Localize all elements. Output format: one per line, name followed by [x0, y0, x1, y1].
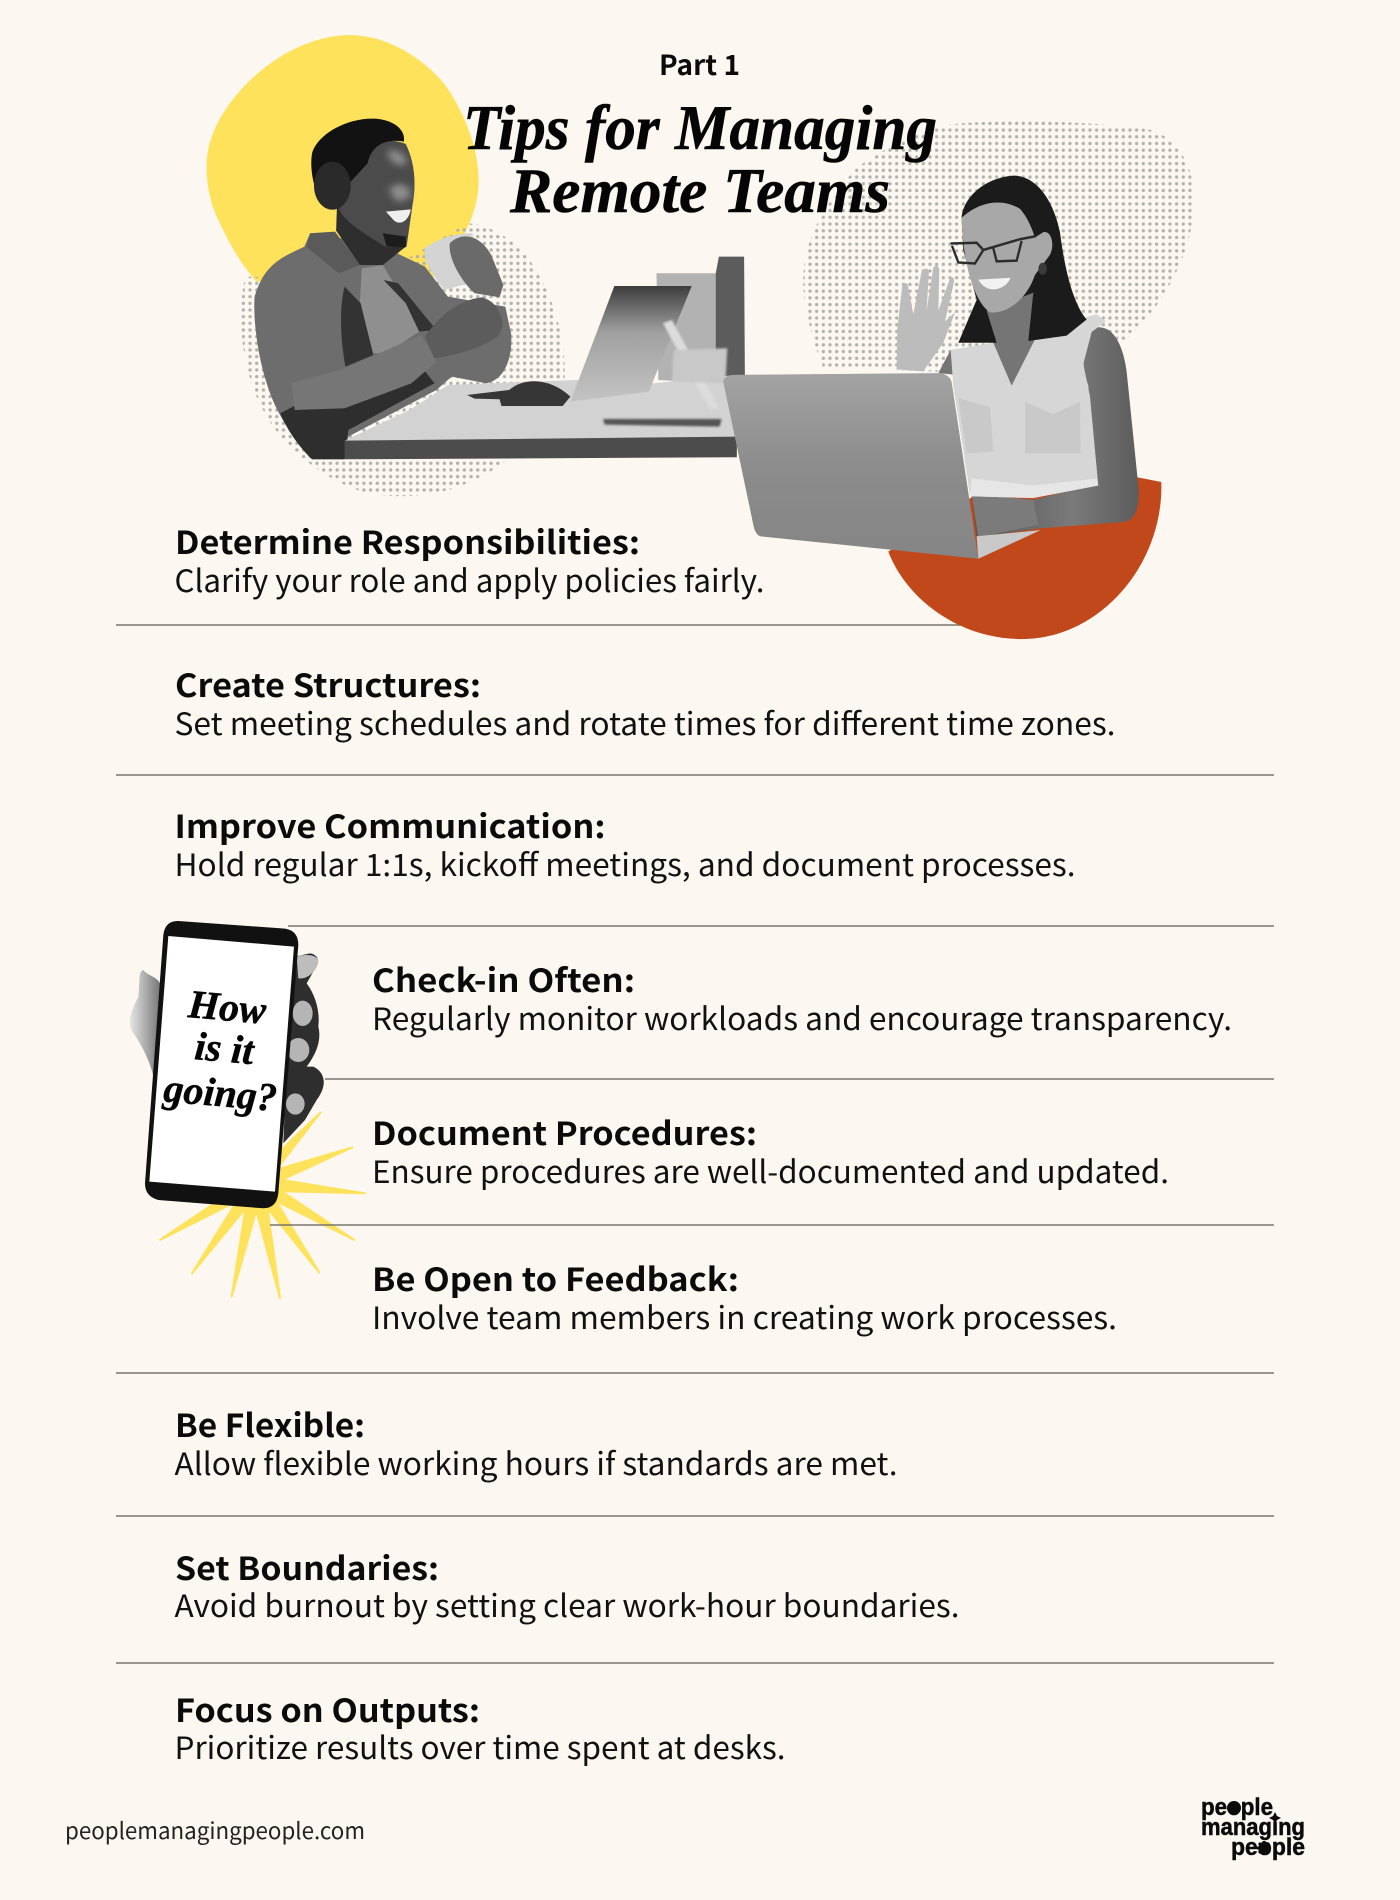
logo — [1201, 1794, 1305, 1861]
man figure — [254, 119, 511, 459]
tip: Focus on Outputs — [174, 1686, 786, 1768]
phone text: How — [186, 981, 268, 1033]
headphones — [314, 162, 351, 210]
tip: Be Open to Feedback — [372, 1255, 1117, 1338]
desk surface — [345, 375, 737, 441]
tip: Be Open to Feedback: Be Open to Feedback: — [372, 1255, 739, 1301]
orange semicircle — [888, 457, 1161, 639]
beard — [383, 233, 406, 247]
logo asterisk o — [1257, 1841, 1271, 1855]
tip: Set Boundaries: Avoid burnout by setting clear work-hour boundaries. — [174, 1581, 960, 1626]
illustration: woman waving at laptop — [723, 121, 1194, 639]
tip: Be Open to Feedback: Involve team members in creating work processes. — [372, 1293, 1117, 1338]
title: Tips for Managing — [463, 92, 937, 163]
hand left — [130, 970, 160, 1077]
tip: Be Flexible: Be Flexible: — [175, 1401, 365, 1447]
hand on keyboard — [972, 494, 1038, 537]
logo: managing — [1201, 1814, 1305, 1841]
phone screen — [149, 936, 294, 1192]
fist — [425, 297, 502, 358]
tip: Create Structures: Create Structures: — [175, 661, 481, 707]
shirt — [254, 233, 511, 459]
tip: Set Boundaries: Set Boundaries: — [175, 1544, 439, 1590]
shirt dark inner panels — [341, 280, 436, 367]
desk front — [345, 437, 737, 459]
tip: Focus on Outputs: Prioritize results over time spent at desks. — [174, 1723, 786, 1768]
tip: Create Structures: Set meeting schedules and rotate times for different time zones. — [174, 699, 1116, 744]
illustration: man with coffee at desk — [206, 35, 745, 496]
logo spark — [1269, 1812, 1281, 1824]
phone text: is it — [193, 1023, 257, 1073]
tip: Create Structures — [174, 661, 1116, 744]
footer URL: peoplemanagingpeople.com — [65, 1812, 365, 1846]
lower shirt shadow — [280, 357, 434, 459]
phone body — [145, 921, 298, 1208]
belt — [970, 478, 1098, 498]
pen stand — [663, 320, 720, 410]
tip: Improve Communication: Hold regular 1:1s, kickoff meetings, and document processes. — [174, 840, 1076, 885]
tip: Improve Communication: Improve Communication: — [174, 802, 606, 848]
halftone dots right — [803, 121, 1194, 375]
tip: Determine Responsibilities — [174, 518, 764, 601]
laptop back — [570, 286, 692, 402]
hair — [311, 119, 404, 208]
smile — [386, 209, 411, 223]
part label: Part 1 — [659, 44, 740, 84]
tip: Set Boundaries — [174, 1544, 960, 1626]
collar — [306, 232, 360, 273]
tip: Document Procedures: Document Procedures: — [372, 1109, 757, 1155]
phone text — [161, 980, 286, 1120]
hand — [897, 265, 955, 371]
pockets — [958, 398, 1081, 453]
tip: Check-in Often — [372, 956, 1232, 1039]
starburst — [160, 1112, 365, 1298]
sleeve — [291, 335, 436, 410]
logo: people — [1231, 1834, 1305, 1861]
tip: Be Flexible — [174, 1401, 898, 1484]
phone text: going? — [161, 1065, 279, 1120]
tip: Document Procedures: Ensure procedures are well-documented and updated. — [372, 1147, 1169, 1192]
header — [463, 44, 937, 226]
tip: Improve Communication — [174, 802, 1076, 885]
face — [962, 202, 1052, 313]
tip: Check-in Often: Regularly monitor workloads and encourage transparency. — [372, 994, 1232, 1039]
tip: Be Flexible: Allow flexible working hours if standards are met. — [174, 1439, 898, 1484]
title — [463, 92, 937, 226]
logo filled o — [1227, 1801, 1241, 1815]
tip: Check-in Often: Check-in Often: — [372, 956, 635, 1002]
mouse and tablet — [467, 381, 570, 406]
blouse — [951, 314, 1106, 498]
mug — [424, 233, 473, 290]
face — [339, 141, 415, 247]
divider over starburst — [270, 1223, 1274, 1227]
background shelf — [656, 273, 718, 383]
neck — [336, 207, 406, 265]
tip: Determine Responsibilities: Determine Responsibilities: — [175, 518, 640, 564]
tip: Document Procedures — [372, 1109, 1169, 1192]
arm — [972, 327, 1139, 537]
laptop lid — [723, 373, 978, 559]
laptop base — [977, 530, 1041, 559]
tip: Focus on Outputs: Focus on Outputs: — [175, 1686, 480, 1732]
sweater — [360, 265, 419, 353]
desk item shadow — [603, 419, 722, 427]
yellow blob — [206, 35, 479, 282]
upper hand — [450, 236, 503, 297]
hair — [958, 176, 1087, 343]
logo: people — [1201, 1794, 1273, 1821]
smile — [978, 278, 1011, 289]
tip: Determine Responsibilities: Clarify your role and apply policies fairly. — [174, 556, 764, 601]
illustration: phone in hand with starburst — [130, 921, 1274, 1298]
face highlights — [388, 150, 410, 202]
title: Remote Teams — [509, 155, 890, 226]
glasses — [951, 236, 1035, 264]
glass and pad — [672, 348, 727, 383]
halftone dots left — [241, 223, 565, 496]
divider lines — [116, 625, 1274, 1663]
neck and chest — [938, 293, 1037, 396]
hand right fingers — [283, 953, 324, 1143]
earring — [1038, 263, 1047, 275]
